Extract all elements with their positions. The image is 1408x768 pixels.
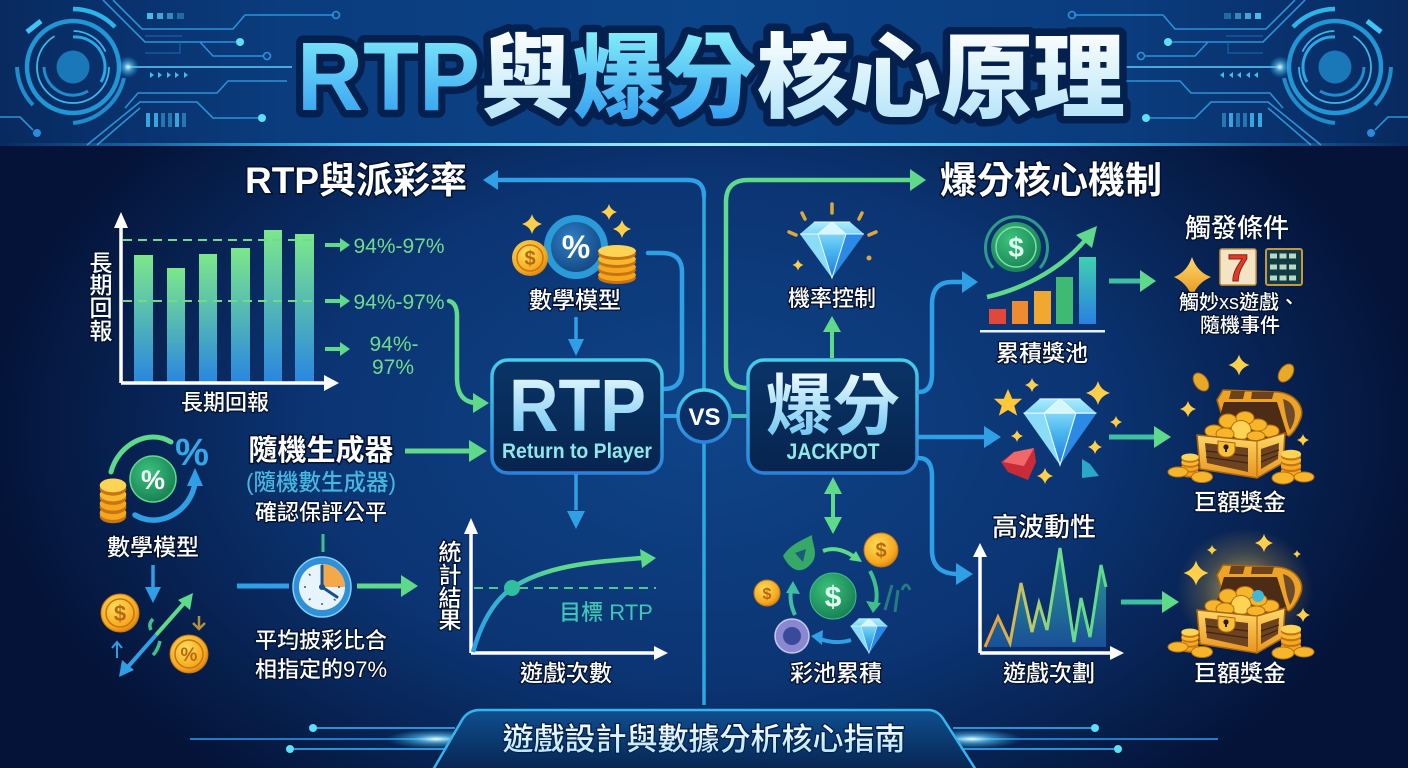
label: pool accumulation: 彩池累積: [790, 660, 882, 686]
panel: long-term return bar chart: [90, 212, 339, 415]
sparkle icon: [1174, 257, 1211, 297]
horizontal axis label: 長期回報: [181, 390, 269, 415]
vertical axis label: 回: [90, 295, 112, 321]
small gold coin: [754, 580, 780, 606]
RTP big text: RTP: [509, 364, 646, 447]
label: math model top: 數學模型: [529, 287, 621, 313]
vertical label: 結: [438, 585, 462, 611]
cycle arrows: [786, 549, 881, 645]
icon: clock with connectors: [237, 534, 418, 617]
label: huge prize 2: 巨額獎金: [1194, 660, 1286, 686]
chart: high volatility: [973, 543, 1124, 660]
title: 爆分: [573, 28, 757, 130]
arrow: generator to RTP box: [405, 440, 487, 462]
connector: green range to RTP box: [449, 301, 489, 413]
panel: jackpot box: [748, 360, 917, 473]
header decoration: left tech circle and circuits: [0, 0, 340, 145]
text block: average payout: 相指定的97%: [255, 657, 387, 682]
panel: trigger conditions: [1174, 213, 1302, 337]
arrow: jackpot box to probability control: [823, 316, 841, 358]
title: RTP: [297, 22, 480, 131]
VS badge: [678, 390, 730, 442]
rising bars: [989, 257, 1096, 324]
fading motion marks: [885, 585, 910, 612]
lucky seven tile: 7: [1227, 248, 1249, 290]
arrow: jackpot box to gem: [918, 426, 1001, 448]
text block: random generator: 隨機生成器: [248, 434, 394, 467]
footer text: 遊戲設計與數據分析核心指南: [502, 722, 906, 757]
convergence curve: [473, 549, 656, 652]
icon: math model cycle: %: [141, 465, 165, 495]
icon: top diamond with rays: [789, 204, 876, 278]
vertical label: 果: [438, 607, 462, 633]
icon: glowing treasure chest 2: [1168, 528, 1314, 659]
connector: green line to jackpot heading: [726, 169, 926, 388]
small diamond: [850, 619, 888, 653]
icon: jackpot pool cycle: [754, 533, 910, 653]
label: probability control: 機率控制: [788, 286, 876, 311]
header glow line: [0, 143, 1408, 146]
jackpot subtitle: JACKPOT: [786, 439, 880, 464]
rising arrow: [987, 226, 1097, 297]
arrow: volatility to chest: [1121, 591, 1179, 613]
coin: $: [1008, 232, 1024, 263]
footer banner: [433, 710, 976, 768]
text block: average payout: [255, 628, 387, 682]
text block: random generator: [246, 434, 396, 525]
connector: jackpot box to volatility chart: [919, 458, 973, 585]
heading: high volatility: 高波動性: [992, 512, 1096, 542]
icon: mathematical model top: %: [562, 229, 590, 265]
title: 核心原理: [757, 28, 1125, 130]
arrow: math model to RTP: [568, 317, 584, 356]
green leaf swirl: [783, 535, 815, 570]
vertical label: 統: [438, 539, 462, 565]
header decoration: right tech circle and circuits: [1068, 0, 1408, 145]
title: [297, 22, 1125, 131]
icon: progressive pool chart: [980, 217, 1105, 332]
panel: RTP box: [492, 360, 662, 473]
heading: RTP and payout: RTP與派彩率: [245, 160, 467, 201]
trigger heading: 觸發條件: [1185, 213, 1289, 243]
target label: 目標 RTP: [559, 600, 653, 625]
label: progressive pool: 累積獎池: [996, 340, 1088, 366]
label: volatility axis: 遊戲次劃: [1003, 660, 1095, 686]
heading: jackpot mechanism: 爆分核心機制: [940, 160, 1162, 201]
vertical label: 計: [438, 562, 462, 588]
area: [985, 548, 1106, 647]
icon: jackpot pool cycle: $: [825, 581, 842, 614]
chart target lines: [123, 240, 315, 301]
gold coin: $: [875, 540, 887, 562]
range labels with arrows: 94%-97%: [353, 235, 445, 258]
icon: coins and exchange arrows: [101, 593, 208, 677]
range labels with arrows: 97%: [372, 356, 414, 379]
arrow: gem to chest: [1109, 426, 1171, 448]
connector: jackpot box to progressive pool: [919, 271, 978, 392]
vertical axis label: 期: [90, 272, 112, 298]
footer left lines: [190, 724, 486, 753]
connector: blue from math model to RTP box right: [648, 253, 682, 389]
target dashed line: [474, 587, 656, 589]
label: math model left: 數學模型: [107, 534, 199, 560]
text block: random generator: 確認保評公平: [255, 500, 387, 525]
chart: statistics convergence: [438, 518, 668, 686]
arrow: double headed jackpot to pool: [824, 477, 842, 534]
icon: coins and exchange arrows: %: [181, 645, 198, 666]
arrow: math model down: [145, 565, 161, 603]
chart axes: [114, 212, 339, 391]
icon: gems and stars: [994, 378, 1122, 484]
text block: random generator: (隨機數生成器): [246, 469, 396, 495]
base line: [980, 330, 1105, 332]
icon: math model cycle: %: [175, 432, 209, 474]
arrow: RTP box to statistics chart: [567, 474, 585, 529]
text block: average payout: 平均披彩比合: [255, 628, 387, 653]
horizontal label: 遊戲次數: [520, 660, 612, 686]
range labels with arrows: [325, 235, 445, 379]
trigger description: 觸妙xs遊戲、: [1179, 291, 1299, 314]
icon: mathematical model top: $: [524, 248, 536, 270]
vertical axis label: 長: [90, 250, 112, 276]
label: huge prize 1: 巨額獎金: [1194, 489, 1286, 515]
icon: treasure chest 1: [1168, 354, 1314, 484]
icon: math model cycle: [100, 432, 209, 523]
chart bars: [134, 230, 314, 382]
line: [985, 548, 1106, 647]
panel: trigger conditions: 隨機事件: [1200, 314, 1280, 337]
symbol grid tile: [1266, 249, 1302, 285]
connector: blue line to RTP heading: [483, 170, 704, 705]
RTP subtitle: Return to Player: [502, 440, 652, 463]
range labels with arrows: 94%-: [369, 333, 419, 356]
footer right lines: [922, 724, 1218, 753]
icon: coins and exchange arrows: $: [114, 601, 126, 626]
VS badge: VS: [688, 404, 721, 431]
purple chip: [775, 619, 809, 653]
gold coin: [864, 533, 898, 567]
small gold coin: $: [763, 586, 772, 603]
connector: RTP box to VS to jackpot box: [662, 414, 748, 418]
icon: mathematical model top: [512, 204, 636, 284]
jackpot big text: 爆分: [766, 369, 900, 444]
range labels with arrows: 94%-97%: [353, 291, 445, 314]
axes: [464, 518, 668, 660]
axes: [973, 543, 1124, 660]
arrow: pool to trigger: [1109, 270, 1156, 292]
vertical axis label: 報: [90, 318, 112, 344]
title: 與: [481, 28, 573, 130]
